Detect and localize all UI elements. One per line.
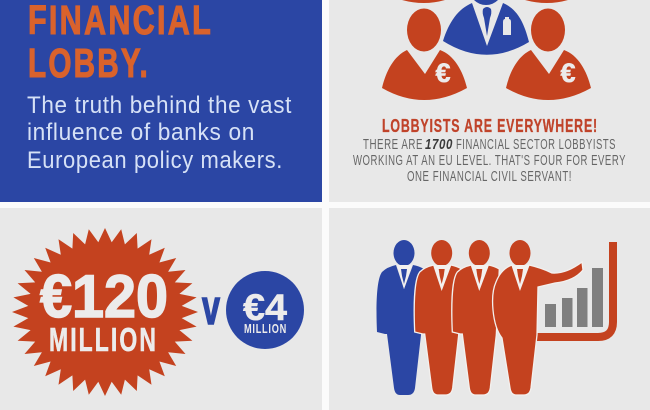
figure: red man one [414,240,462,395]
starburst: 120 million: €120 [40,263,168,330]
subtitle text [27,92,292,174]
figure: presenting red man [493,240,583,395]
text block: 1700 [425,137,453,153]
icon: lobbyist left [382,8,467,100]
subtitle text: The truth behind the vast [27,92,292,119]
panel: lobbyists [329,0,650,202]
text block: THERE ARE [363,137,423,153]
figure: blue man [377,240,424,395]
subtitle text: European policy makers. [27,147,283,174]
starburst: 120 million [12,228,198,396]
panel: business figures [329,208,650,410]
circle: 4 million [226,271,304,349]
figure: red man two [452,240,499,395]
circle: 4 million: €4 [243,287,287,328]
starburst: 120 million: MILLION [49,321,158,358]
subtitle text: influence of banks on [27,119,255,146]
icon: civil servant [443,0,529,55]
panel: spending comparison [0,208,322,410]
versus label: v [202,281,220,335]
icon: lobbyist right [506,8,591,100]
chart: bars and frame [530,242,613,337]
title [28,0,213,86]
icon: top lobbyists cropped [402,0,568,3]
icon: lobbyist left: € [435,58,451,88]
panel: intro [0,0,322,202]
text block [353,137,626,185]
title: LOBBY. [28,40,150,86]
text block: ONE FINANCIAL CIVIL SERVANT! [407,169,572,185]
circle: 4 million: MILLION [244,322,287,336]
icon: lobbyist right: € [560,58,576,88]
